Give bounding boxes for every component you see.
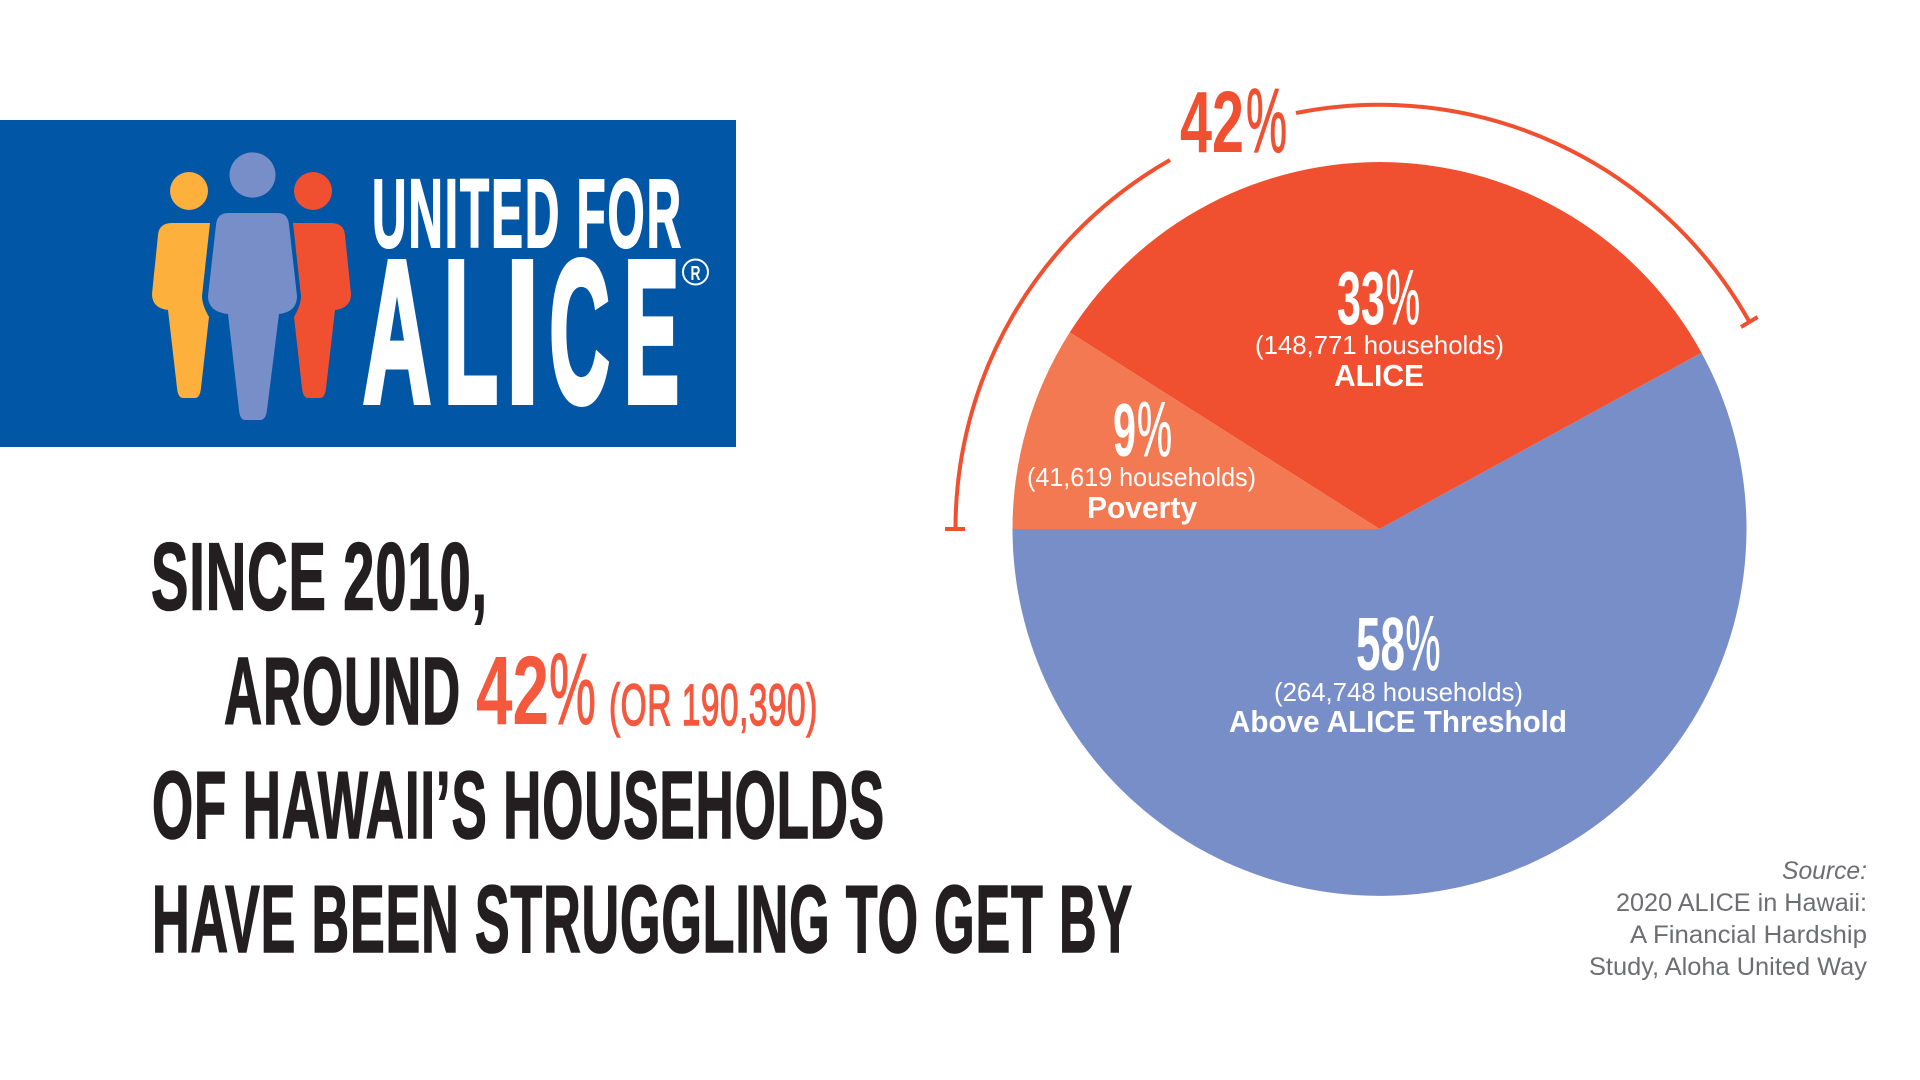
source note: Study, Aloha United Way bbox=[1589, 953, 1867, 981]
highlight percent sign: % bbox=[549, 634, 596, 746]
arc label: 42 percent: 42 bbox=[1180, 74, 1244, 171]
source note: A Financial Hardship bbox=[1630, 921, 1867, 949]
pie chart bbox=[1012, 162, 1747, 896]
logo banner: E bbox=[624, 218, 679, 444]
headline line 3: OF HAWAII’S HOUSEHOLDS bbox=[152, 752, 885, 859]
label: above threshold slice: % bbox=[1406, 599, 1440, 687]
label: poverty slice: (41,619 households) bbox=[1027, 462, 1256, 492]
label: ALICE slice bbox=[1255, 253, 1504, 393]
bracket arc: 42 percent bbox=[945, 105, 1758, 529]
label: ALICE slice: % bbox=[1386, 253, 1420, 341]
label: poverty slice bbox=[1027, 385, 1256, 525]
headline line 2 bbox=[224, 634, 818, 746]
label: ALICE slice: 33 bbox=[1337, 256, 1385, 340]
headline line 1: SINCE 2010, bbox=[151, 524, 488, 630]
highlight 42: 42 bbox=[476, 636, 549, 745]
logo text: alice: I bbox=[506, 218, 539, 444]
source note: Source: bbox=[1782, 857, 1867, 885]
logo banner bbox=[0, 120, 736, 447]
source note: 2020 ALICE in Hawaii: bbox=[1616, 889, 1867, 917]
registered mark bbox=[683, 260, 708, 285]
logo text: alice: C bbox=[550, 218, 610, 444]
logo text: alice bbox=[363, 218, 679, 444]
logo text: alice: L bbox=[444, 218, 498, 444]
label: poverty slice: 9 bbox=[1113, 388, 1136, 472]
label: above threshold slice bbox=[1229, 599, 1567, 739]
source note bbox=[1589, 857, 1867, 981]
label: poverty slice: Poverty bbox=[1087, 490, 1198, 525]
slice: above ALICE threshold bbox=[1012, 353, 1747, 896]
label: ALICE slice: (148,771 households) bbox=[1255, 330, 1504, 360]
label: above threshold slice: (264,748 households) bbox=[1274, 677, 1523, 707]
logo banner: UNITED FOR bbox=[372, 159, 683, 268]
slice: poverty bbox=[1012, 332, 1380, 529]
registered mark: R bbox=[690, 263, 701, 285]
label: poverty slice: % bbox=[1137, 385, 1172, 473]
logo text: alice: A bbox=[363, 218, 431, 444]
headline bbox=[151, 524, 1133, 973]
label: above threshold slice: 58 bbox=[1356, 602, 1405, 686]
icon: three people bbox=[152, 152, 351, 420]
headline line 2: AROUND bbox=[224, 638, 461, 745]
headline line 4: HAVE BEEN STRUGGLING TO GET BY bbox=[152, 866, 1133, 973]
label: above threshold slice: Above ALICE Threshold bbox=[1229, 704, 1567, 739]
arc label: 42 percent: % bbox=[1246, 71, 1287, 172]
slice: ALICE bbox=[1070, 162, 1702, 529]
label: ALICE slice: ALICE bbox=[1334, 358, 1424, 393]
highlight or 190,390: (OR 190,390) bbox=[609, 673, 818, 738]
